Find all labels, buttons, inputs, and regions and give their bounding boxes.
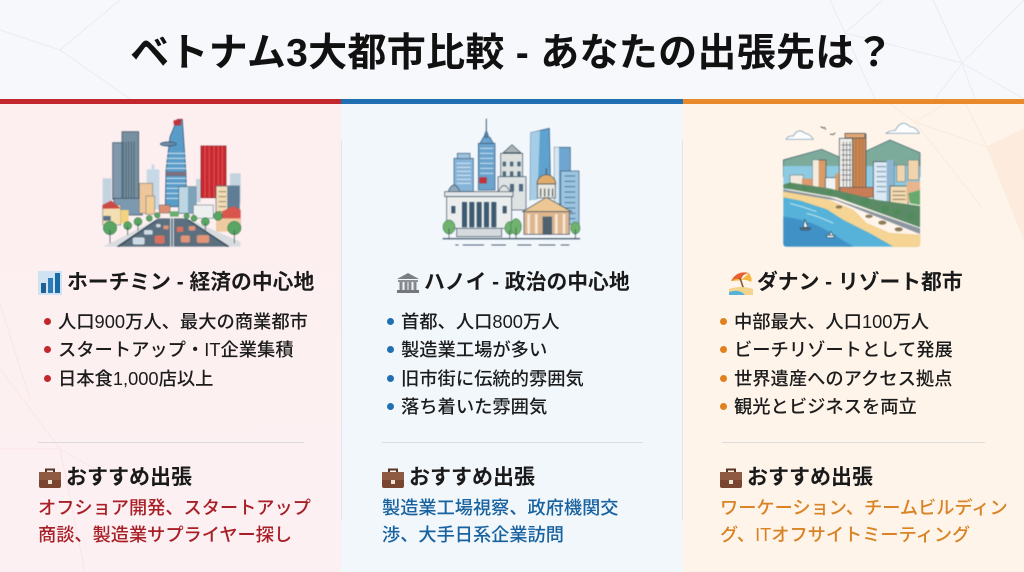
recommendation text: [382, 498, 618, 544]
bullet dot: [387, 346, 394, 353]
heading: おすすめ出張: おすすめ出張: [409, 466, 535, 489]
bullet dot: [720, 375, 727, 382]
recommendation text: グ、ITオフサイトミーティング: [720, 524, 970, 544]
list item: 製造業工場が多い: [401, 339, 547, 360]
bullet dot: [387, 375, 394, 382]
title: ベトナム3大都市比較 - あなたの出張先は？: [130, 32, 894, 75]
bullet dot: [387, 318, 394, 325]
panel: ホーチミン: [0, 99, 341, 572]
list item: 日本食1,000店以上: [58, 368, 213, 389]
icon: briefcase: [39, 468, 61, 488]
bullet list: [44, 311, 308, 389]
list item: 世界遺産へのアクセス拠点: [734, 368, 952, 389]
list item: 落ち着いた雰囲気: [401, 396, 547, 417]
icon: beach umbrella: [729, 272, 753, 295]
icon: briefcase: [382, 468, 404, 488]
bullet dot: [720, 403, 727, 410]
icon: briefcase: [720, 468, 742, 488]
accent bar: red: [0, 99, 341, 104]
list item: 観光とビジネスを両立: [734, 396, 917, 417]
recommendation text: 渉、大手日系企業訪問: [382, 524, 564, 544]
list item: 旧市街に伝統的雰囲気: [401, 368, 584, 389]
heading: おすすめ出張: おすすめ出張: [66, 466, 192, 489]
list item: スタートアップ・IT企業集積: [58, 339, 294, 360]
heading: ホーチミン: ホーチミン - 経済の中心地: [67, 271, 314, 294]
bullet list: [387, 311, 584, 417]
icon: bar chart: [38, 271, 62, 295]
list item: 中部最大、人口100万人: [734, 311, 929, 332]
bullet dot: [720, 318, 727, 325]
bullet dot: [44, 375, 51, 382]
header background: [0, 0, 1024, 99]
illustration: Da Nang beach: [782, 122, 922, 248]
illustration: Hanoi skyline: [442, 118, 581, 246]
recommendation text: ワーケーション、チームビルディン: [720, 498, 1008, 518]
panel: ハノイ: [341, 99, 683, 572]
panel: ダナン: [683, 99, 1024, 572]
recommendation text: [38, 498, 311, 544]
accent bar: orange: [683, 99, 1024, 104]
heading: おすすめ出張: おすすめ出張: [747, 466, 873, 489]
bullet dot: [720, 346, 727, 353]
recommendation text: 製造業工場視察、政府機関交: [382, 498, 618, 518]
bullet dot: [387, 403, 394, 410]
heading: ダナン: ダナン - リゾート都市: [757, 271, 963, 294]
bullet list: [720, 311, 953, 417]
recommendation text: オフショア開発、スタートアップ: [38, 498, 311, 518]
list item: 人口900万人、最大の商業都市: [58, 311, 308, 332]
bullet dot: [44, 318, 51, 325]
illustration: Ho Chi Minh skyline: [102, 118, 242, 248]
bullet dot: [44, 346, 51, 353]
icon: classical building: [397, 273, 419, 293]
heading: ハノイ: ハノイ - 政治の中心地: [424, 271, 630, 294]
accent bar: blue: [341, 99, 683, 104]
list item: 首都、人口800万人: [401, 311, 559, 332]
recommendation text: 商談、製造業サプライヤー探し: [38, 524, 292, 544]
list item: ビーチリゾートとして発展: [734, 339, 953, 360]
recommendation text: [720, 498, 1008, 544]
